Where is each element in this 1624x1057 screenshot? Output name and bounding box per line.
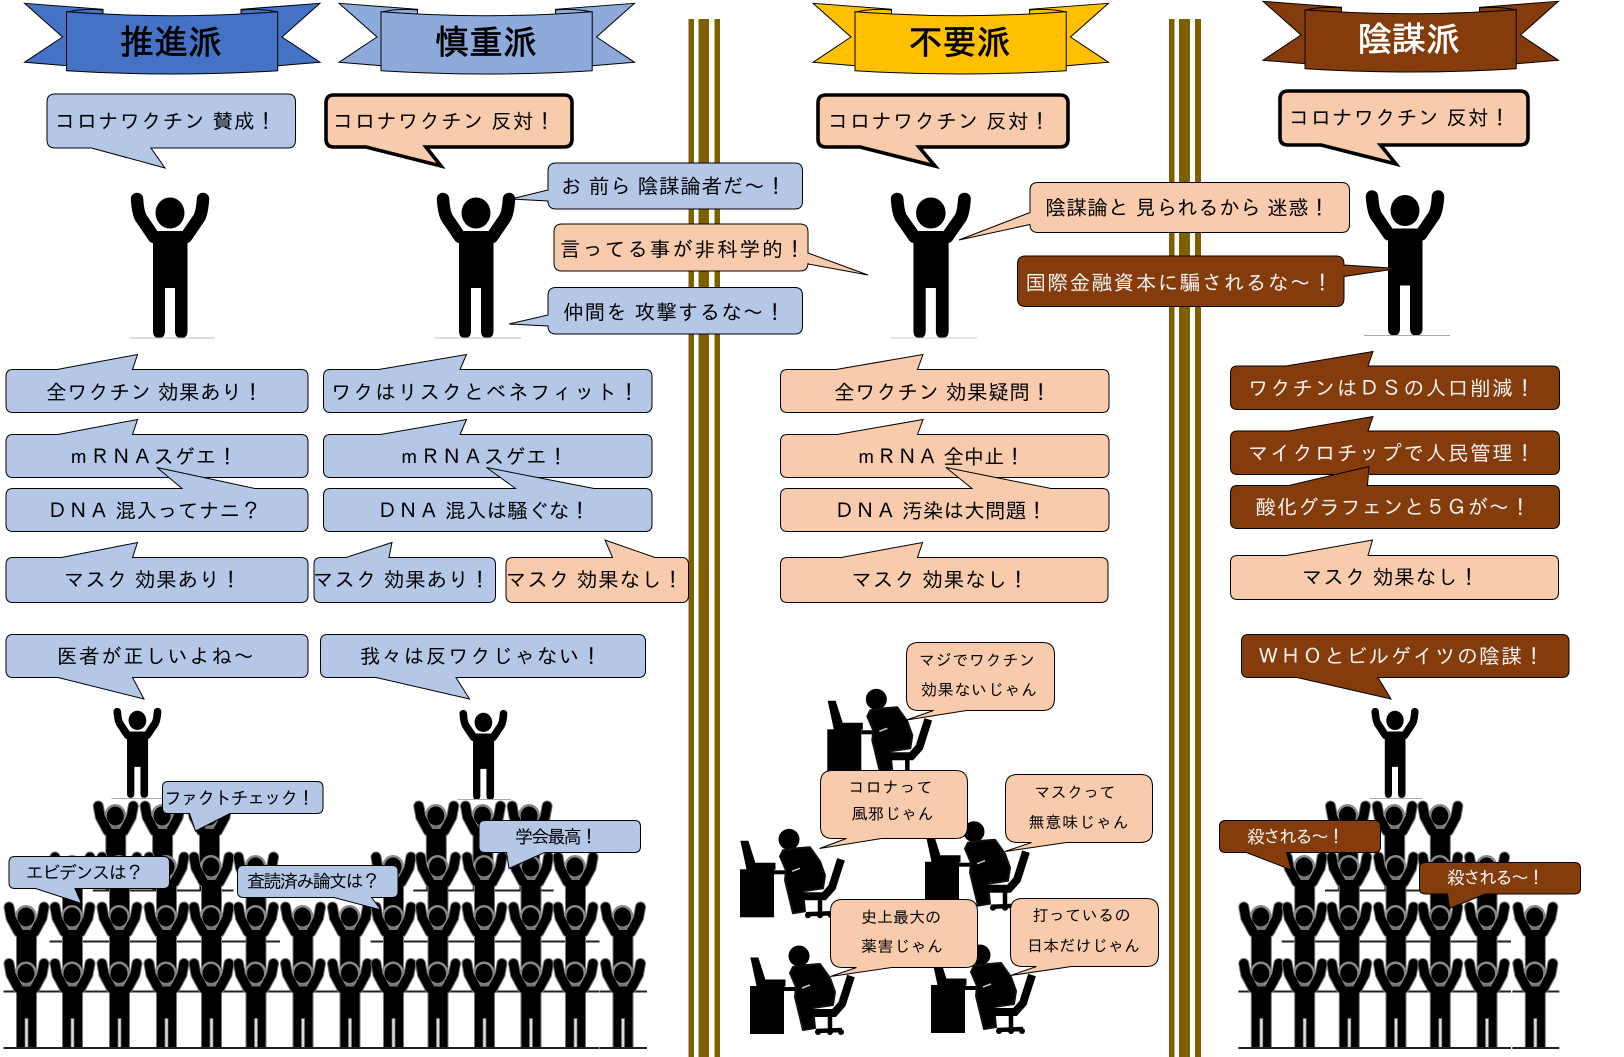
callout: 殺される 1: [1220, 820, 1380, 870]
callout: エビデンスは: [9, 856, 170, 904]
crowd pyramid: 陰謀派 supporters: [1238, 804, 1559, 1049]
callout: お前ら陰謀論者だ: [511, 163, 802, 209]
callout: 酸化グラフェンと5Gが: 酸化グラフェンと５Ｇが～！: [1256, 496, 1530, 520]
callout: 陰謀論と見られるから迷惑: [959, 182, 1350, 240]
banner: 陰謀派: [1263, 1, 1558, 72]
callout: 医者が正しいよね: 医者が正しいよね～: [57, 646, 254, 668]
callout: mRNA全中止: ｍＲＮＡ 全中止！: [856, 446, 1025, 469]
callout: コロナワクチン反対: [1280, 91, 1528, 164]
figure: 陰謀派 small leader: [1370, 711, 1422, 799]
divider: right triple vertical line: [1169, 19, 1201, 1057]
callout: 殺される 1: 殺される～！: [1247, 827, 1345, 847]
callout: DNA混入は騒ぐな: [324, 468, 652, 532]
callout: 仲間を攻撃するな: [509, 288, 802, 334]
banner: 陰謀派: 陰謀派: [1358, 21, 1460, 59]
figure: 推進派 leader: [130, 198, 215, 338]
callout: 打っているの日本だけじゃん: [1010, 898, 1158, 976]
callout: 全ワクチン効果あり: 全ワクチン 効果あり！: [46, 382, 263, 404]
callout: マスク効果あり: マスク 効果あり！: [313, 569, 490, 592]
callout: マスク効果あり: [6, 542, 308, 602]
callout: マスク効果なし: マスク 効果なし！: [852, 569, 1028, 592]
banner: 不要派: 不要派: [908, 24, 1010, 62]
figure: 慎重派 small leader: [458, 713, 511, 800]
callout: WHOとビルゲイツの陰謀: [1242, 634, 1569, 699]
panel: 推進派 column: [6, 3, 398, 910]
figure: 不要派 leader: [890, 198, 977, 338]
panel: 陰謀派 column: [1018, 1, 1580, 909]
callout: 陰謀論と見られるから迷惑: 陰謀論と 見られるから 迷惑！: [1046, 197, 1330, 220]
banner: 慎重派: [339, 3, 634, 74]
callout: ファクトチェック: ファクトチェック！: [164, 788, 315, 808]
callout: コロナワクチン反対: [326, 95, 572, 166]
callout: マイクロチップで人民管理: マイクロチップで人民管理！: [1248, 442, 1535, 466]
callout: マスクって無意味じゃん: マスクって: [1034, 785, 1116, 802]
crowd pyramid: 推進派 and 慎重派 supporters: [4, 804, 647, 1049]
callout: マスク効果あり: マスク 効果あり！: [64, 569, 241, 592]
callout: DNA汚染は大問題: [780, 468, 1109, 532]
banner: 推進派: [24, 3, 320, 74]
figure: 陰謀派 leader: [1364, 195, 1450, 336]
banner: 慎重派: 慎重派: [435, 24, 537, 62]
panel: 慎重派 column: [313, 3, 868, 869]
divider: left triple vertical line: [688, 19, 720, 1057]
callout: 言ってる事が非科学的: 言ってる事が非科学的！: [560, 238, 805, 262]
callout: マスクって無意味じゃん: 無意味じゃん: [1028, 814, 1128, 832]
callout: 全ワクチン効果疑問: 全ワクチン 効果疑問！: [834, 382, 1051, 404]
banner: 不要派: [813, 3, 1108, 74]
callout: 史上最大の薬害じゃん: 薬害じゃん: [861, 938, 943, 956]
callout: ファクトチェック: [162, 782, 323, 831]
callout: DNA汚染は大問題: ＤＮＡ 汚染は大問題！: [834, 500, 1047, 523]
callout: 全ワクチン効果あり: [6, 354, 308, 412]
callout: マスク効果なし: [780, 542, 1108, 602]
callout: ワクチンはDSの人口削減: [1230, 352, 1560, 410]
callout: マジでワクチン効果ないじゃん: [906, 642, 1054, 720]
callout: お前ら陰謀論者だ: お 前ら 陰謀論者だ～！: [561, 176, 786, 198]
callout: マスク効果なし: マスク 効果なし！: [1302, 566, 1479, 590]
callout: 査読済み論文は: 査読済み論文は？: [247, 872, 380, 892]
callout: マスク効果あり: [313, 542, 496, 602]
callout: 国際金融資本に騙されるな: 国際金融資本に騙されるな～！: [1026, 272, 1332, 295]
callout: 学会最高: 学会最高！: [515, 827, 598, 847]
callout: コロナワクチン反対: コロナワクチン 反対！: [333, 110, 555, 134]
callout: 我々は反ワクじゃない: 我々は反ワクじゃない！: [360, 646, 602, 668]
callout: 史上最大の薬害じゃん: 史上最大の: [861, 910, 941, 927]
callout: マイクロチップで人民管理: [1230, 416, 1560, 474]
panel: 不要派 column: [780, 3, 1350, 977]
callout: WHOとビルゲイツの陰謀: ＷＨＯとビルゲイツの陰謀！: [1258, 646, 1544, 668]
figure: 推進派 small leader: [112, 711, 163, 799]
figure: 慎重派 leader: [435, 198, 521, 338]
callout: 査読済み論文は: [238, 866, 398, 910]
callout: マジでワクチン効果ないじゃん: 効果ないじゃん: [921, 682, 1037, 700]
callout: コロナワクチン反対: コロナワクチン 反対！: [828, 110, 1050, 134]
callout: mRNAスゲエ: [6, 420, 308, 478]
callout: 打っているの日本だけじゃん: 打っているの: [1032, 908, 1130, 925]
callout: DNA混入は騒ぐな: ＤＮＡ 混入は騒ぐな！: [377, 500, 590, 523]
banner: 推進派: 推進派: [120, 24, 222, 62]
callout: 医者が正しいよね: [6, 634, 308, 699]
callout: コロナワクチン賛成: コロナワクチン 賛成！: [55, 110, 276, 134]
callout: ワクチンはDSの人口削減: ワクチンはＤＳの人口削減！: [1248, 378, 1535, 400]
callout: DNA混入ってナニ: [6, 468, 308, 532]
callout: マスク効果なし: [1230, 540, 1558, 600]
callout: 学会最高: [479, 820, 640, 868]
callout: 全ワクチン効果疑問: [780, 354, 1109, 412]
callout: 殺される 2: 殺される～！: [1447, 868, 1545, 888]
callout: マスク効果なし: マスク 効果なし！: [506, 569, 683, 592]
callout: mRNA全中止: [780, 420, 1109, 478]
callout: DNA混入ってナニ: ＤＮＡ 混入ってナニ？: [47, 500, 261, 523]
callout: エビデンスは: エビデンスは？: [26, 863, 144, 883]
callout: 殺される 2: [1420, 862, 1580, 908]
callout: ワクはリスクとベネフィット: ワクはリスクとベネフィット！: [331, 382, 639, 404]
callout: 言ってる事が非科学的: [554, 224, 868, 275]
callout: 史上最大の薬害じゃん: [830, 900, 978, 976]
callout: コロナワクチン賛成: [47, 94, 296, 168]
callout: 国際金融資本に騙されるな: [1018, 256, 1398, 306]
callout: マスク効果なし: [506, 540, 688, 602]
callout: mRNAスゲエ: [324, 420, 652, 478]
callout: コロナワクチン反対: コロナワクチン 反対！: [1289, 107, 1510, 130]
callout: コロナって風邪じゃん: 風邪じゃん: [852, 806, 934, 824]
callout: 我々は反ワクじゃない: [320, 634, 646, 699]
callout: コロナワクチン反対: [818, 95, 1068, 166]
callout: マスクって無意味じゃん: [1005, 774, 1152, 852]
callout: コロナって風邪じゃん: コロナって: [848, 780, 932, 797]
callout: mRNAスゲエ: ｍＲＮＡスゲエ！: [399, 446, 568, 469]
callout: 打っているの日本だけじゃん: 日本だけじゃん: [1027, 938, 1140, 956]
callout: 酸化グラフェンと5Gが: [1230, 466, 1560, 528]
callout: ワクはリスクとベネフィット: [324, 354, 652, 412]
callout: mRNAスゲエ: ｍＲＮＡスゲエ！: [68, 446, 238, 469]
callout: 仲間を攻撃するな: 仲間を 攻撃するな～！: [563, 302, 785, 324]
callout: マジでワクチン効果ないじゃん: マジでワクチン: [919, 652, 1035, 670]
icons: people at desks: [740, 689, 1032, 1035]
callout: コロナって風邪じゃん: [820, 770, 968, 848]
